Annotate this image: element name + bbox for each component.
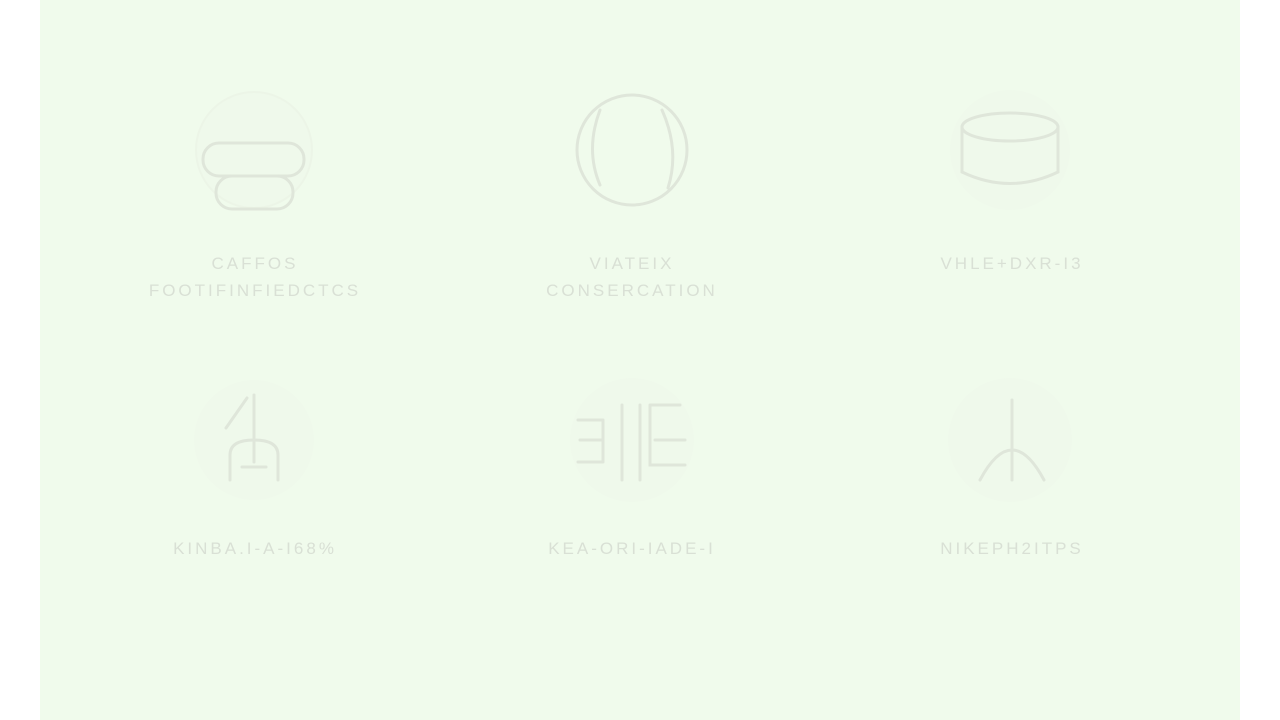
label: carbon: CAFFOS [212,254,298,273]
icon: carbon footprint [196,92,312,209]
label: water: CONSERCATION [546,281,718,300]
icon: hand/plant [194,380,314,500]
icon: tree [948,378,1072,502]
label: third: VHLE+DXR-I3 [940,254,1084,273]
label: fourth: KINBA.I-A-I68% [173,539,337,558]
label: carbon [149,254,361,300]
icon: water [577,95,687,205]
label: water [546,254,718,300]
label: water: VIATEIX [590,254,674,273]
icon: structure [570,378,694,502]
icon: cylinder [950,90,1070,210]
label: sixth: NIKEPH2ITPS [940,539,1084,558]
label: fifth: KEA-ORI-IADE-I [548,539,716,558]
label: carbon: FOOTIFINFIEDCTCS [149,281,361,300]
